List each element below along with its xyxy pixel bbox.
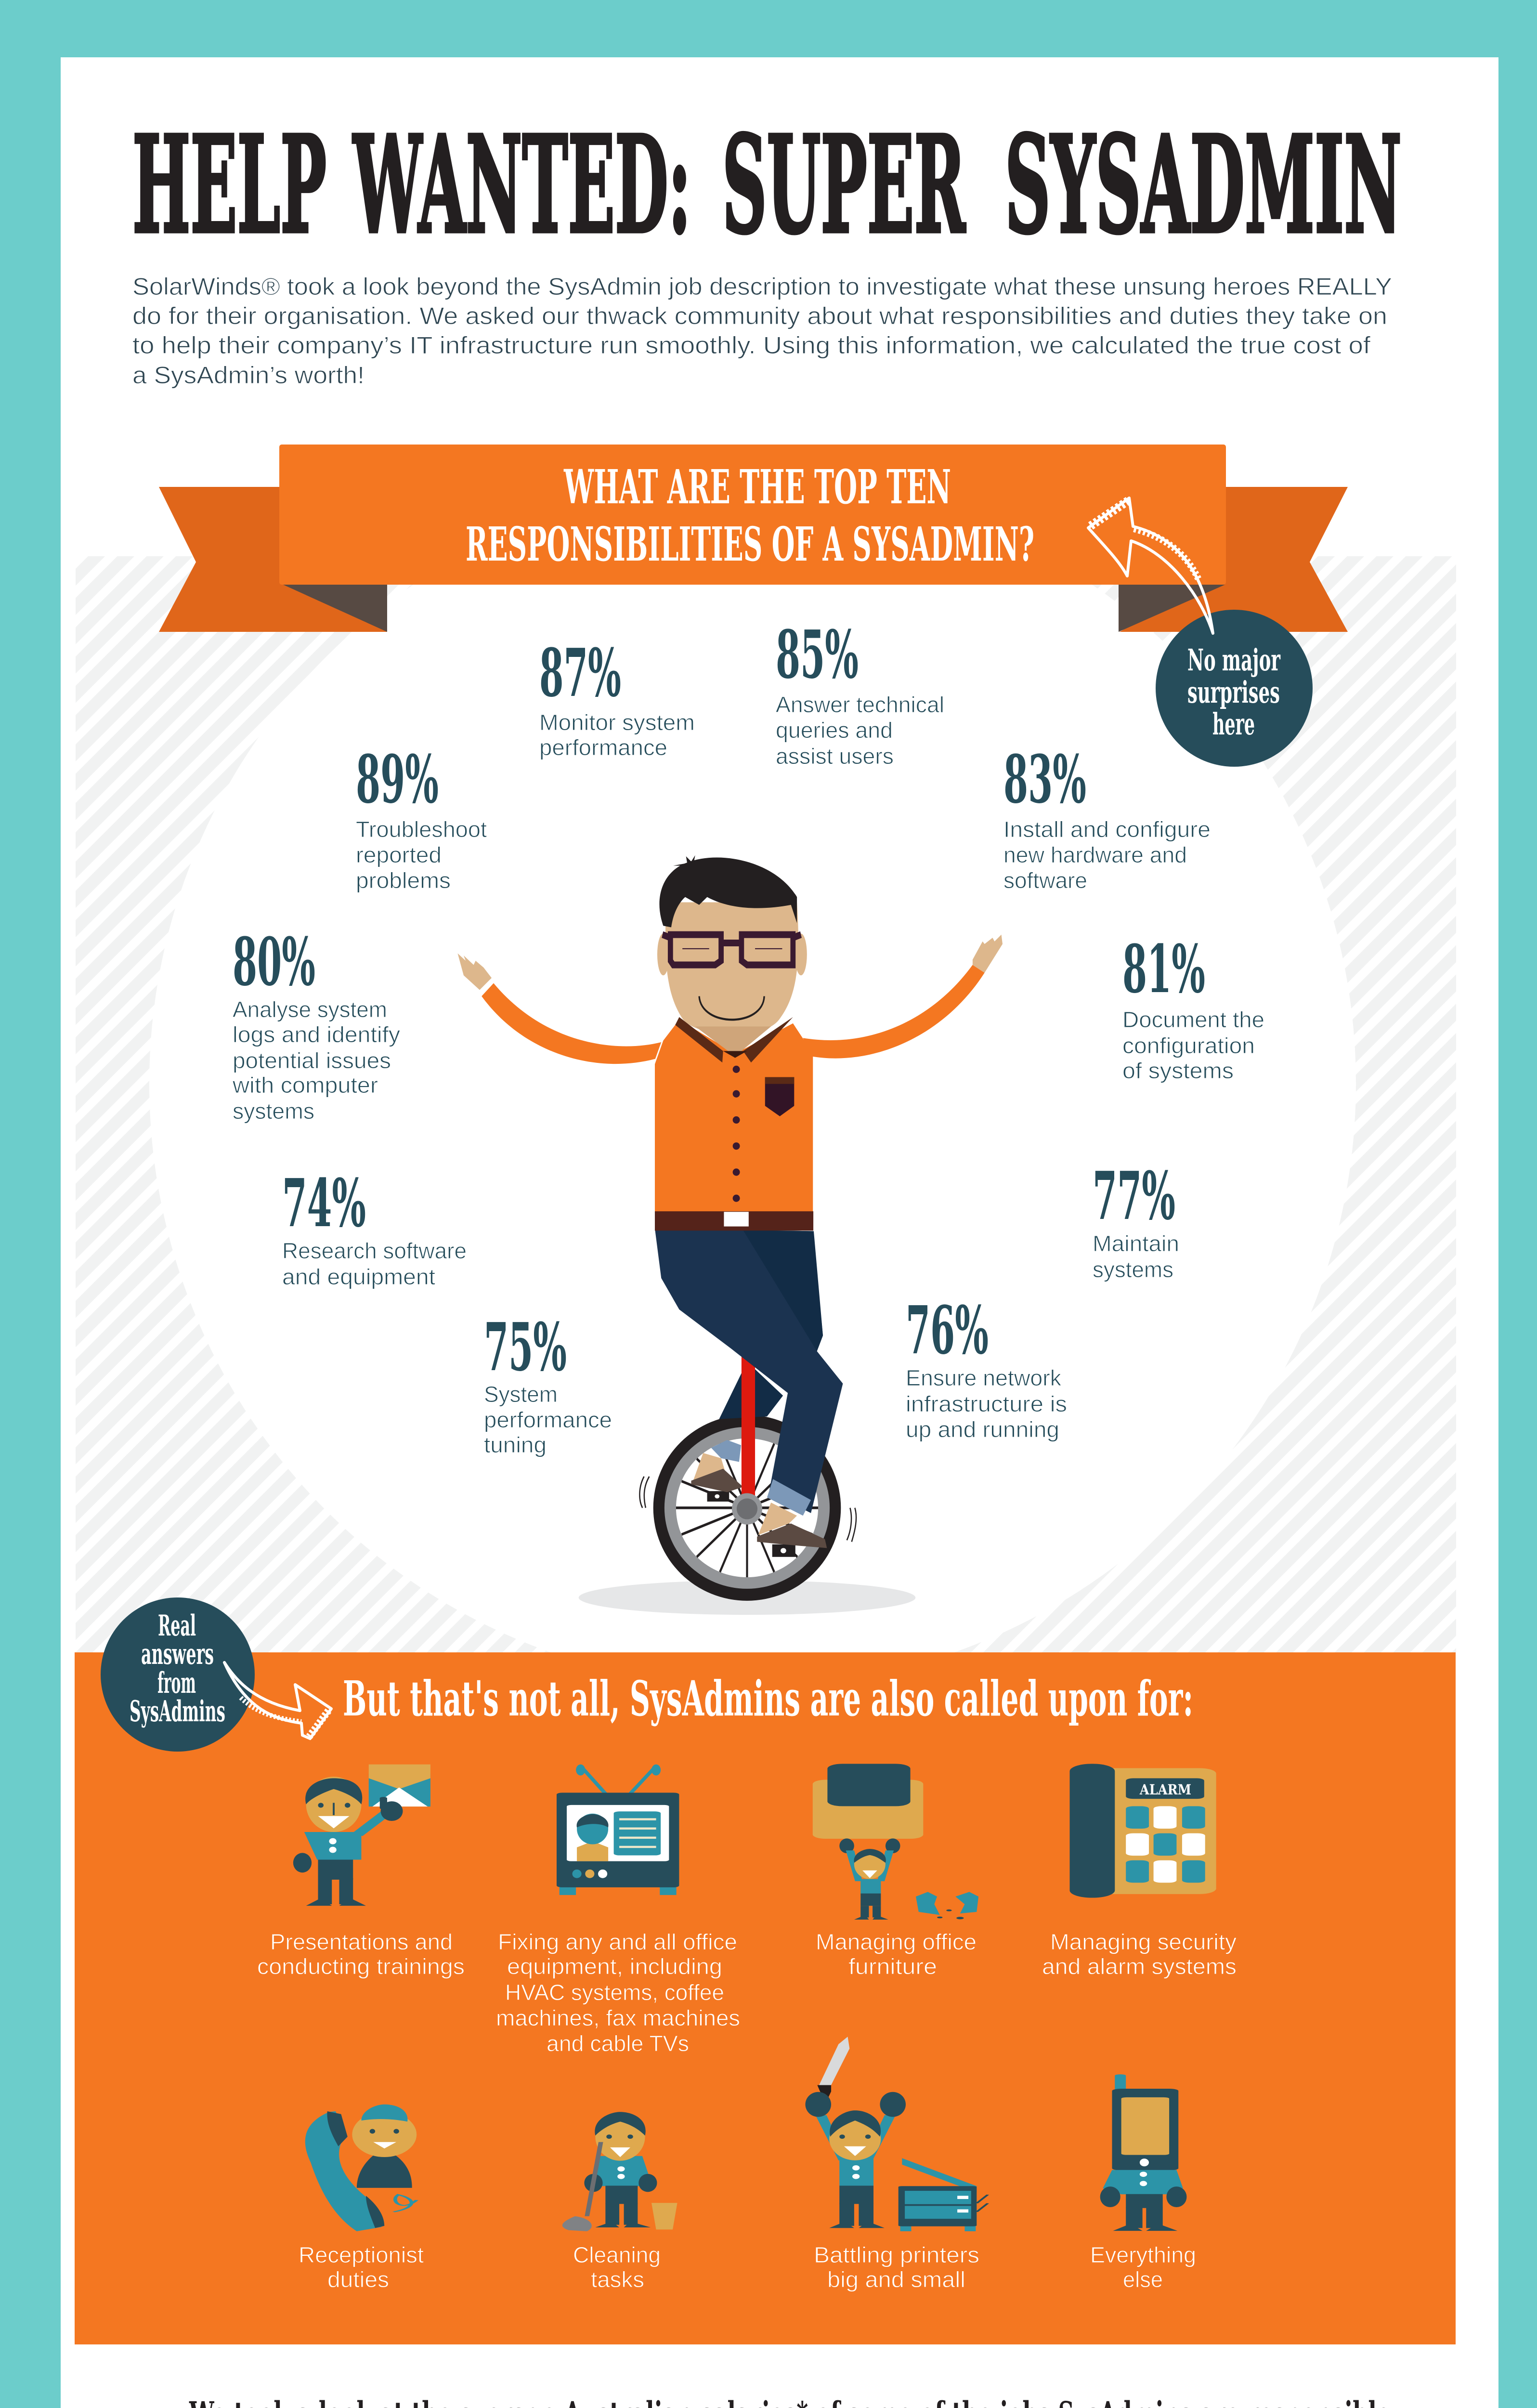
label: everything else: else [1123, 2267, 1163, 2292]
stat: 85% answer technical queries: queries and [776, 718, 893, 743]
label: receptionist duties [299, 2242, 424, 2292]
stat: 80% analyse system logs: with computer [232, 1073, 378, 1098]
arrow: real answers to heading [224, 1662, 331, 1739]
icon: alarm keypad phone [1070, 1764, 1216, 1898]
callout bubble: no major surprises: here [1212, 707, 1255, 742]
stat: 76% ensure network: 76% [906, 1292, 989, 1369]
stat: 87% monitor system performance: 87% [539, 634, 621, 712]
intro paragraph: SolarWinds® took a look beyond the SysAdmin job description to investigate what these unsung heroes REALLY [132, 273, 1392, 300]
stat: 75% system performance tuning: System [484, 1382, 558, 1407]
label: cleaning tasks [573, 2242, 661, 2292]
stat: 89% troubleshoot [356, 741, 487, 893]
callout bubble: no major surprises [1156, 610, 1313, 767]
stat: 81% document configuration: Document the [1122, 1007, 1264, 1032]
label: fixing office equipment: equipment, including [507, 1954, 722, 1979]
label: cleaning tasks: Cleaning [573, 2242, 661, 2267]
callout bubble: real answers from sysadmins: answers [141, 1637, 214, 1671]
label: everything else: Everything [1090, 2242, 1196, 2267]
title: WANTED: [352, 107, 691, 263]
stat: 80% analyse system logs: logs and identify [233, 1022, 400, 1047]
stat: 75% system performance tuning: performance [484, 1407, 612, 1432]
panel: also called upon for [75, 1652, 1456, 2344]
stat: 81% document configuration [1122, 930, 1264, 1083]
label: receptionist duties: duties [327, 2267, 389, 2292]
label: cleaning tasks: tasks [591, 2267, 644, 2292]
banner heading [466, 459, 1034, 572]
icon: person with sword and printer [805, 2037, 988, 2231]
stat: 74% research software: Research software [282, 1238, 467, 1263]
stat: 83% install and configure: Install and configure [1003, 817, 1211, 842]
label: receptionist duties: Receptionist [299, 2242, 424, 2267]
label: managing furniture [816, 1929, 977, 1979]
callout bubble: real answers from sysadmins: from [157, 1666, 196, 1700]
stat: 77% maintain systems: 77% [1093, 1157, 1175, 1235]
label: battling printers: big and small [827, 2267, 965, 2292]
stat: 80% analyse system logs: systems [233, 1099, 314, 1124]
stat: 89% troubleshoot: problems [356, 868, 451, 893]
stat: 83% install and configure [1003, 741, 1211, 893]
intro paragraph: to help their company’s IT infrastructure run smoothly. Using this information, we calculated the true cost of [132, 332, 1370, 359]
sysadmin on unicycle illustration [457, 855, 1003, 1615]
label: battling printers: Battling printers [814, 2242, 979, 2267]
label: managing furniture: Managing office [816, 1929, 977, 1954]
label: presentations: Presentations and [270, 1929, 453, 1954]
callout bubble: real answers from sysadmins: SysAdmins [130, 1695, 225, 1728]
stat: 80% analyse system logs [232, 923, 400, 1124]
label: fixing office equipment [496, 1929, 740, 2056]
callout bubble: real answers from sysadmins: Real [158, 1609, 196, 1643]
striped backdrop with white circle [76, 480, 1456, 1652]
intro paragraph: do for their organisation. We asked our thwack community about what responsibilities and duties they take on [132, 302, 1387, 329]
label: managing furniture: furniture [848, 1954, 937, 1979]
stat: 77% maintain systems: Maintain [1093, 1231, 1179, 1256]
intro paragraph [132, 273, 1392, 389]
icon: television [557, 1765, 679, 1895]
stat: 76% ensure network: Ensure network [906, 1365, 1062, 1390]
label: managing security: and alarm systems [1042, 1954, 1237, 1979]
stat: 77% maintain systems: systems [1093, 1257, 1173, 1282]
stat: 76% ensure network: up and running [906, 1417, 1059, 1442]
stat: 76% ensure network [906, 1292, 1067, 1442]
stat: 85% answer technical queries: 85% [776, 616, 859, 694]
stat: 80% analyse system logs: Analyse system [233, 997, 387, 1022]
stat: 80% analyse system logs: 80% [233, 923, 315, 1001]
title: SUPER [722, 107, 966, 263]
title: HELP [132, 107, 326, 263]
stat: 83% install and configure: software [1003, 868, 1087, 893]
stat: 76% ensure network: infrastructure is [906, 1391, 1067, 1416]
icon: person lifting armchair [813, 1764, 978, 1920]
label: battling printers [814, 2242, 979, 2292]
title [132, 107, 1402, 263]
stat: 89% troubleshoot: Troubleshoot [356, 817, 487, 842]
ribbon banner [159, 445, 1348, 632]
label: fixing office equipment: HVAC systems, coffee [505, 1980, 724, 2005]
stat: 85% answer technical queries: Answer technical [776, 692, 944, 717]
label: managing security: Managing security [1050, 1929, 1237, 1954]
stat: 74% research software: 74% [282, 1165, 366, 1242]
stat: 81% document configuration: configuration [1122, 1033, 1255, 1058]
label: everything else [1090, 2242, 1196, 2292]
stat: 75% system performance tuning: 75% [484, 1309, 567, 1386]
icon: presenter with envelope [293, 1765, 430, 1906]
banner heading: WHAT ARE THE TOP TEN [563, 459, 951, 514]
stat: 89% troubleshoot: 89% [356, 741, 439, 818]
stat: 77% maintain systems [1093, 1157, 1179, 1282]
label: managing security [1042, 1929, 1237, 1979]
stat: 85% answer technical queries: assist users [776, 744, 894, 769]
icon: receptionist with phone [305, 2105, 417, 2231]
stat: 83% install and configure: 83% [1003, 741, 1086, 818]
stat: 87% monitor system performance: performance [539, 735, 667, 760]
stat: 75% system performance tuning [484, 1309, 612, 1457]
icon: mobile phone person [1100, 2074, 1186, 2231]
text: ALARM [1140, 1781, 1191, 1798]
label: fixing office equipment: machines, fax machines [496, 2005, 740, 2030]
banner heading: RESPONSIBILITIES OF A SYSADMIN? [466, 517, 1034, 572]
stat: 81% document configuration: of systems [1122, 1058, 1234, 1083]
stat: 75% system performance tuning: tuning [484, 1432, 547, 1457]
stat: 85% answer technical queries [776, 616, 944, 769]
label: fixing office equipment: Fixing any and all office [498, 1929, 737, 1954]
stat: 87% monitor system performance [539, 634, 695, 760]
callout bubble: no major surprises: surprises [1187, 675, 1280, 710]
callout bubble: real answers from sysadmins [101, 1597, 255, 1752]
stat: 74% research software: and equipment [282, 1264, 435, 1289]
stat: 80% analyse system logs: potential issues [233, 1048, 391, 1073]
stat: 81% document configuration: 81% [1122, 930, 1205, 1008]
label: presentations: conducting trainings [257, 1954, 465, 1979]
label: presentations [257, 1929, 465, 1979]
stat: 83% install and configure: new hardware and [1003, 842, 1187, 867]
intro paragraph: a SysAdmin’s worth! [132, 362, 365, 389]
stat: 89% troubleshoot: reported [356, 842, 442, 867]
stat: 87% monitor system performance: Monitor system [539, 710, 695, 735]
callout bubble: no major surprises: No major [1187, 642, 1281, 678]
arrow: from bubble to banner [1088, 498, 1213, 633]
label: fixing office equipment: and cable TVs [547, 2031, 689, 2056]
icon: cleaner with mop and bucket [562, 2112, 677, 2231]
stat: 74% research software [282, 1165, 467, 1289]
